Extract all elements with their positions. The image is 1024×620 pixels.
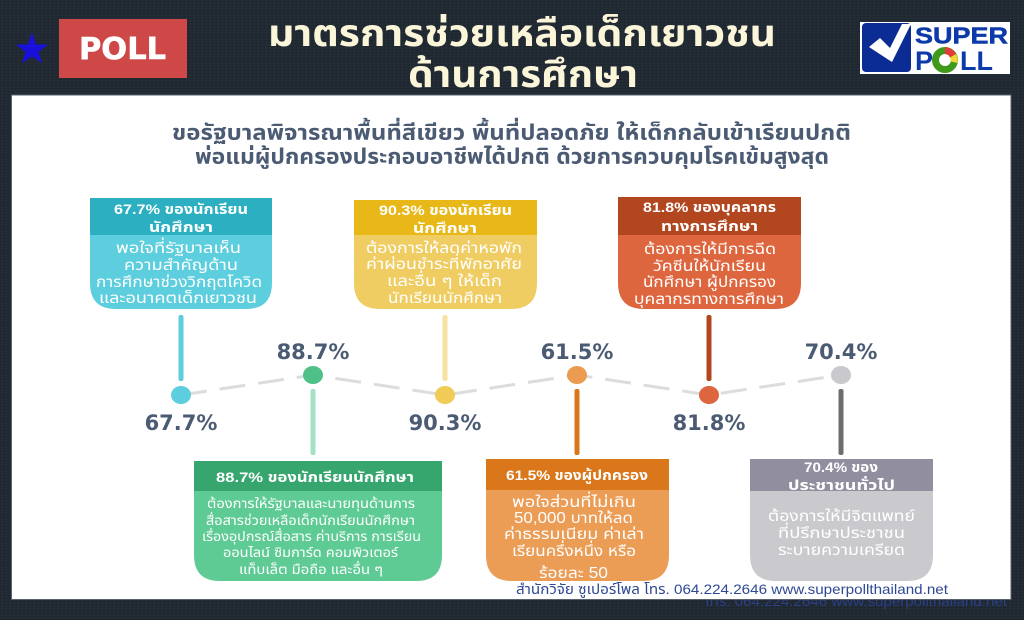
card: 70.4% general public: ระบายความเครียด [778, 542, 905, 559]
node: 81.8% [699, 386, 719, 404]
value labels: 67.7% [145, 411, 217, 435]
stem: 90.3% [442, 315, 448, 381]
card: 88.7% students: 88.7% ของนักเรียนนักศึกษา [216, 469, 414, 485]
card: 88.7% students [194, 461, 442, 581]
title [268, 13, 776, 95]
node: 61.5% [567, 366, 587, 384]
node: 90.3% [435, 386, 455, 404]
line chart: dashed connector [181, 375, 841, 395]
card: 90.3% students: นักศึกษา [413, 220, 477, 236]
card: 67.7% students: นักศึกษา [149, 219, 213, 235]
logo: super poll: P [915, 46, 933, 76]
card: 81.8% education staff [618, 197, 801, 309]
card: 81.8% education staff: นักศึกษา ผู้ปกครอง [643, 274, 776, 291]
card: 81.8% education staff: ต้องการให้มีการฉีด [644, 241, 776, 258]
card: 90.3% students: และอื่น ๆ ให้เด็ก [387, 270, 502, 290]
card: 81.8% education staff: 81.8% ของบุคลากร [643, 199, 776, 216]
card: 61.5% parents [486, 459, 669, 582]
value labels: 88.7% [277, 340, 349, 364]
card: 67.7% students: 67.7% ของนักเรียน [114, 201, 248, 217]
stem: 70.4% [838, 389, 844, 455]
value labels: 81.8% [673, 411, 745, 435]
card: 90.3% students [354, 200, 537, 309]
node: 67.7% [171, 386, 191, 404]
card: 81.8% education staff: บุคลากรทางการศึกษา [634, 291, 784, 308]
card: 88.7% students: แท็บเล็ต มือถือ และอื่น ๆ [239, 560, 383, 577]
value labels: 70.4% [805, 340, 877, 364]
card: 67.7% students [90, 198, 272, 309]
stem: 81.8% [706, 315, 712, 381]
card: 61.5% parents: ร้อยละ 50 [539, 565, 608, 582]
title: มาตรการช่วยเหลือเด็กเยาวชน [268, 13, 776, 54]
card: 61.5% parents: ค่าธรรมเนียม ค่าเล่า [504, 525, 644, 543]
card: 70.4% general public: 70.4% ของ [804, 459, 878, 475]
card: 88.7% students: ต้องการให้รัฐบาลและนายทุนด้านการ [207, 496, 415, 511]
card: 90.3% students: ค่าผ่อนชำระที่พักอาศัย [366, 253, 522, 273]
stem: 61.5% [574, 389, 580, 455]
value labels [145, 340, 877, 435]
card: 61.5% parents: 50,000 บาทให้ลด [514, 510, 633, 527]
card: 61.5% parents: 61.5% ของผู้ปกครอง [506, 467, 648, 485]
card: 81.8% education staff: ทางการศึกษา [661, 218, 758, 234]
value labels: 90.3% [409, 411, 481, 435]
title: ด้านการศึกษา [408, 54, 638, 95]
icon: blue star [16, 32, 48, 63]
poll badge: POLL [79, 32, 166, 67]
card: 67.7% students: พอใจที่รัฐบาลเห็น [116, 237, 241, 257]
subtitle: ขอรัฐบาลพิจารณาพื้นที่สีเขียว พื้นที่ปลอดภัย ให้เด็กกลับเข้าเรียนปกติ [172, 117, 851, 144]
value labels: 61.5% [541, 340, 613, 364]
card: 90.3% students: 90.3% ของนักเรียน [379, 202, 512, 218]
card: 88.7% students: สื่อสารช่วยเหลือเด็กนักเรียนนักศึกษา [206, 511, 415, 528]
subtitle: พ่อแม่ผู้ปกครองประกอบอาชีพได้ปกติ ด้วยการควบคุมโรคเข้มสูงสุด [195, 146, 829, 170]
stem: 67.7% [178, 315, 184, 381]
card: 90.3% students: ต้องการให้ลดค่าหอพัก [366, 239, 522, 257]
card: 61.5% parents: เรียนครึ่งหนึ่ง หรือ [512, 540, 636, 560]
poll badge [59, 19, 187, 78]
logo: super poll: LL [960, 46, 993, 76]
card: 67.7% students: การศึกษาช่วงวิกฤตโควิด [96, 273, 262, 291]
node: 88.7% [303, 366, 323, 384]
footer: contact line: สำนักวิจัย ซูเปอร์โพล โทร. 064.224.2646 www.superpollthailand.net [516, 581, 948, 598]
card: 90.3% students: นักเรียนนักศึกษา [388, 290, 502, 307]
card: 81.8% education staff: วัคซีนให้นักเรียน [653, 258, 766, 275]
node: 70.4% [831, 366, 851, 384]
card: 67.7% students: และอนาคตเด็กเยาวชน [99, 289, 257, 307]
logo: super poll [860, 22, 1010, 76]
card: 67.7% students: ความสำคัญด้าน [124, 257, 238, 274]
card: 70.4% general public: ที่ปรึกษาประชาชน [778, 522, 905, 542]
card: 70.4% general public: ประชาชนทั่วไป [788, 475, 895, 493]
subtitle [172, 117, 851, 170]
card: 70.4% general public: ต้องการให้มีจิตแพทย์ [768, 508, 915, 525]
footer: ghost contact line: โทร. 064.224.2646 www.superpollthailand.net [705, 593, 1007, 609]
card: 88.7% students: เรื่องอุปกรณ์สื่อสาร ค่าบริการ การเรียน [202, 527, 421, 544]
stem: 88.7% [310, 389, 316, 455]
card: 61.5% parents: พอใจส่วนที่ไม่เกิน [512, 491, 636, 511]
logo: super poll: SUPER [915, 22, 1008, 48]
card: 88.7% students: ออนไลน์ ซิมการ์ด คอมพิวเตอร์ [223, 545, 399, 560]
card: 70.4% general public [750, 459, 933, 581]
panel: main white panel [12, 95, 1011, 600]
